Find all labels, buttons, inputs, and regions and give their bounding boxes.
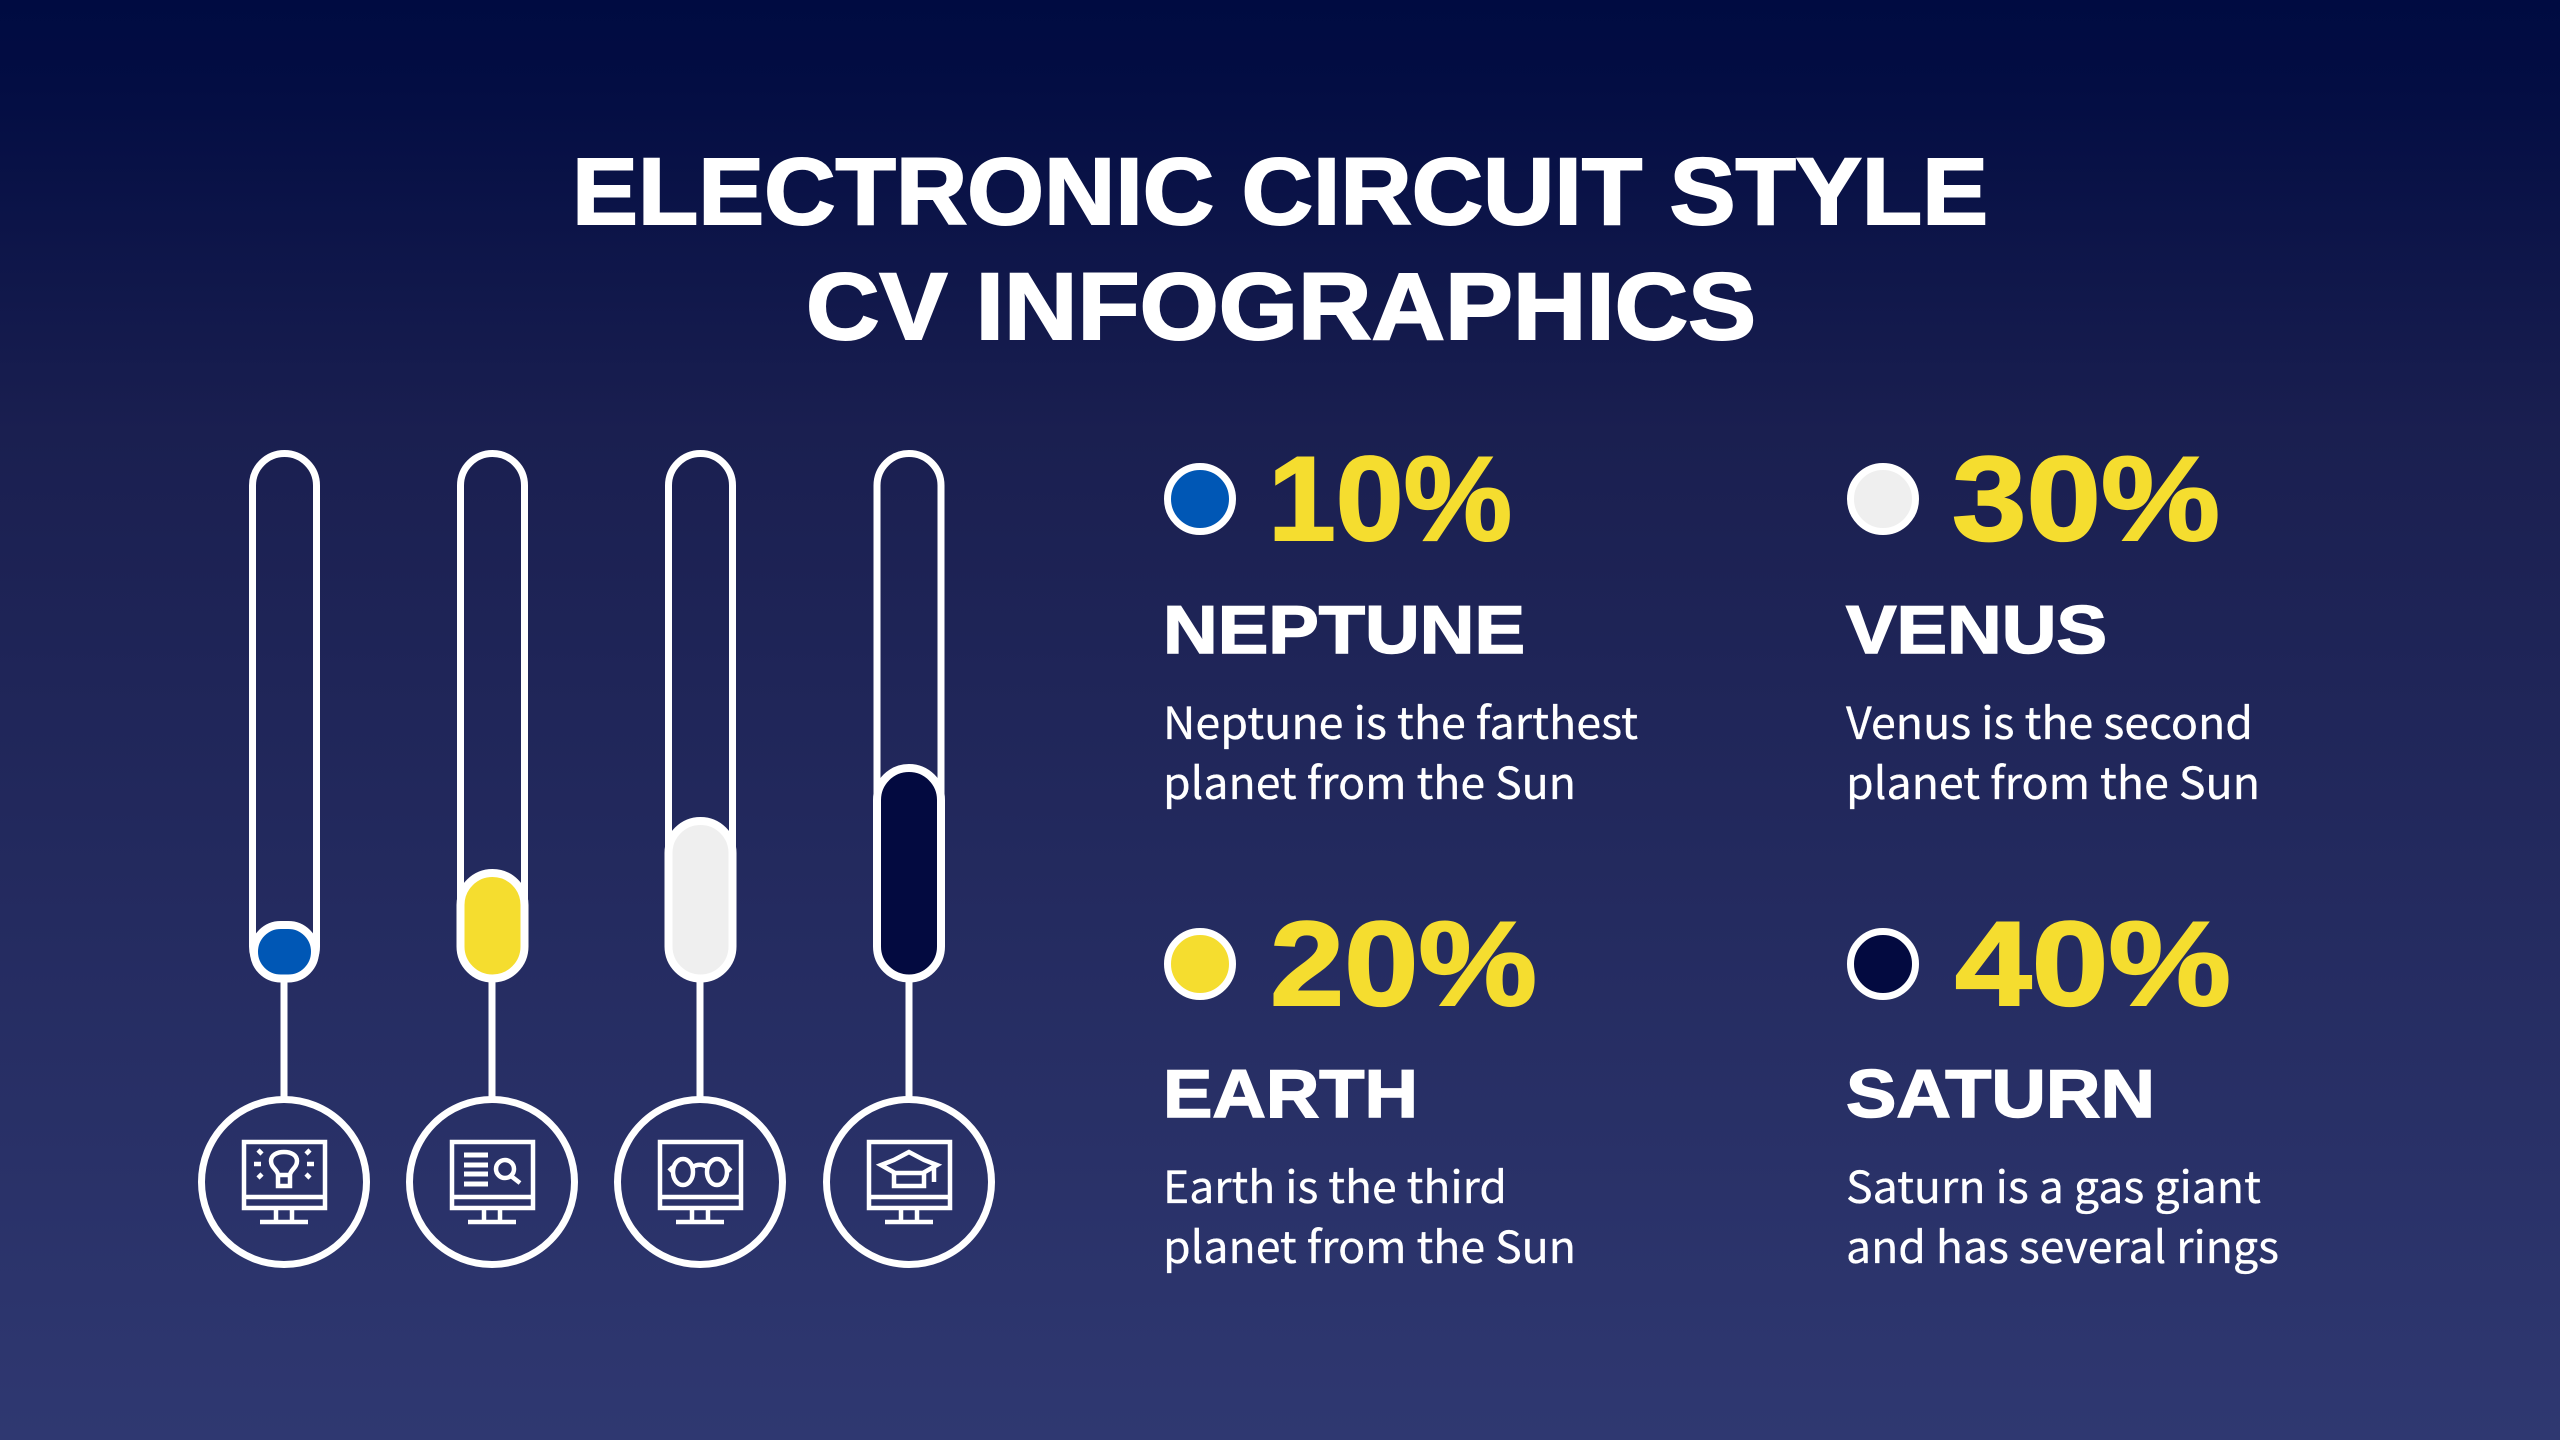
description: Saturn xyxy=(1846,1152,2279,1276)
tube 2: yellow 20% xyxy=(460,454,524,978)
name: Earth: EARTH xyxy=(1163,1056,1418,1132)
dot: blue xyxy=(1168,466,1232,532)
name: Venus: VENUS xyxy=(1846,592,2107,668)
description: Earth xyxy=(1163,1152,1576,1276)
description: Venus: planet from the Sun xyxy=(1846,748,2260,812)
value: 30%: 30% xyxy=(1952,432,2220,566)
description: Neptune: Neptune is the farthest xyxy=(1163,688,1638,752)
name: Neptune: NEPTUNE xyxy=(1163,592,1525,668)
value: 40%: 40% xyxy=(1955,897,2231,1031)
title: CV INFOGRAPHICS xyxy=(806,254,1756,360)
stat: Venus xyxy=(1846,432,2260,812)
description: Neptune: planet from the Sun xyxy=(1163,748,1576,812)
description: Venus xyxy=(1846,688,2260,812)
icon badge: idea monitor xyxy=(202,982,366,1264)
tube 1: blue 10% xyxy=(252,454,316,978)
title xyxy=(572,139,1988,360)
dot: navy xyxy=(1850,932,1916,996)
dot: light grey xyxy=(1850,466,1916,532)
stat: Saturn xyxy=(1846,897,2279,1276)
description: Neptune xyxy=(1163,688,1638,812)
icon badge: glasses monitor xyxy=(618,982,782,1264)
thermometer chart xyxy=(252,454,941,978)
description: Earth: Earth is the third xyxy=(1163,1152,1507,1216)
value: 20%: 20% xyxy=(1270,897,1537,1031)
description: Saturn: Saturn is a gas giant xyxy=(1846,1152,2261,1216)
name: Saturn: SATURN xyxy=(1846,1056,2155,1132)
tube 3: light grey 30% xyxy=(668,454,732,978)
title: ELECTRONIC CIRCUIT STYLE xyxy=(572,139,1988,245)
description: Earth: planet from the Sun xyxy=(1163,1212,1576,1276)
stat: Neptune xyxy=(1163,432,1638,812)
stat: Earth xyxy=(1163,897,1576,1276)
value: 10%: 10% xyxy=(1268,432,1512,566)
description: Venus: Venus is the second xyxy=(1846,688,2253,752)
tube 4: navy 40% xyxy=(877,454,941,978)
dot: yellow xyxy=(1168,932,1232,996)
description: Saturn: and has several rings xyxy=(1846,1212,2279,1276)
icon badge: search monitor xyxy=(410,982,574,1264)
icon badge: graduation monitor xyxy=(826,982,992,1264)
